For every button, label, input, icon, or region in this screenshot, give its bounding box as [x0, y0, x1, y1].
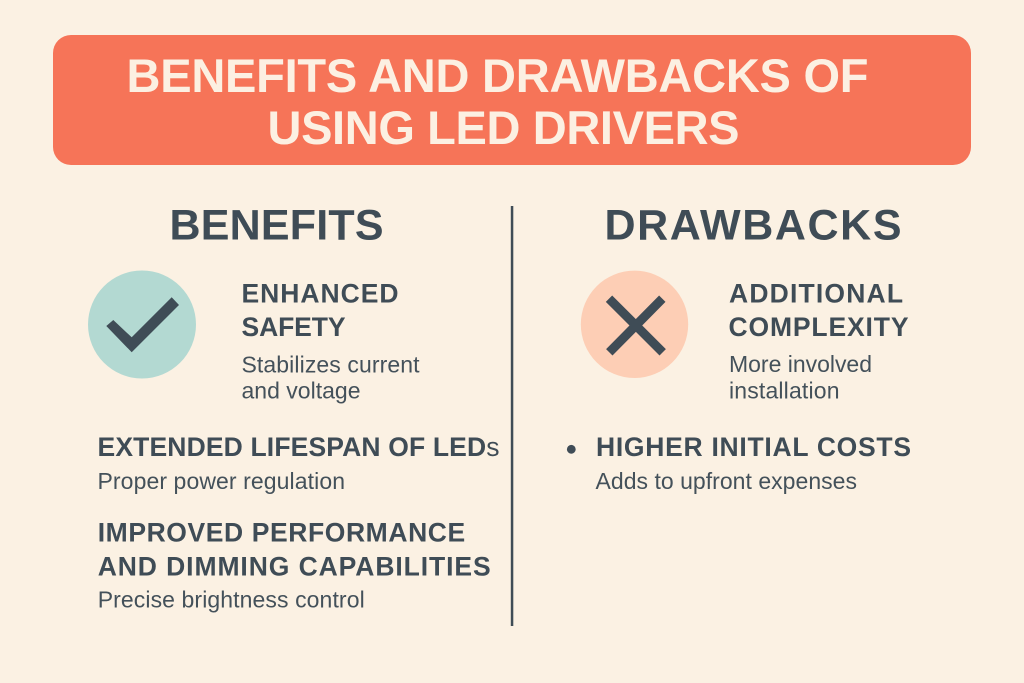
heading: improved performance: AND DIMMING CAPABILITIES [98, 551, 491, 581]
drawback: higher initial costs [596, 432, 911, 494]
heading: extended lifespan: EXTENDED LIFESPAN OF LEDs [98, 432, 500, 462]
bullet [567, 445, 576, 454]
heading: improved performance: IMPROVED PERFORMANCE [98, 518, 465, 548]
heading: enhanced safety: SAFETY [242, 312, 346, 342]
benefit: extended lifespan [98, 432, 500, 494]
text: installation [729, 351, 872, 404]
text: installation: installation [729, 378, 840, 404]
heading: additional complexity: COMPLEXITY [728, 312, 909, 342]
title: BENEFITS AND DRAWBACKS OF [126, 49, 868, 102]
text: power regulation: Proper power regulation [98, 468, 345, 494]
heading: additional complexity: ADDITIONAL [729, 278, 903, 308]
icon: cross mark [581, 271, 688, 378]
benefit: enhanced safety [242, 278, 420, 404]
heading: benefits: BENEFITS [170, 202, 384, 250]
heading: drawbacks: DRAWBACKS [604, 202, 902, 250]
icon: check mark [88, 270, 196, 378]
drawback: additional complexity [728, 278, 909, 404]
heading: improved performance [98, 518, 491, 581]
heading: enhanced safety [242, 278, 398, 342]
heading: additional complexity [728, 278, 909, 342]
heading: higher initial costs: HIGHER INITIAL COSTS [596, 432, 911, 462]
text: stabilizes: Stabilizes current [242, 352, 420, 378]
text: brightness control: Precise brightness control [98, 586, 365, 612]
text: stabilizes [242, 352, 420, 404]
title [126, 49, 868, 154]
text: installation: More involved [729, 351, 872, 377]
benefit: improved performance [98, 518, 491, 612]
heading: enhanced safety: ENHANCED [242, 278, 398, 308]
title: USING LED DRIVERS [268, 101, 740, 154]
center divider [511, 206, 513, 626]
text: upfront expenses: Adds to upfront expenses [596, 468, 857, 494]
title banner [53, 35, 971, 165]
text: stabilizes: and voltage [242, 378, 360, 404]
